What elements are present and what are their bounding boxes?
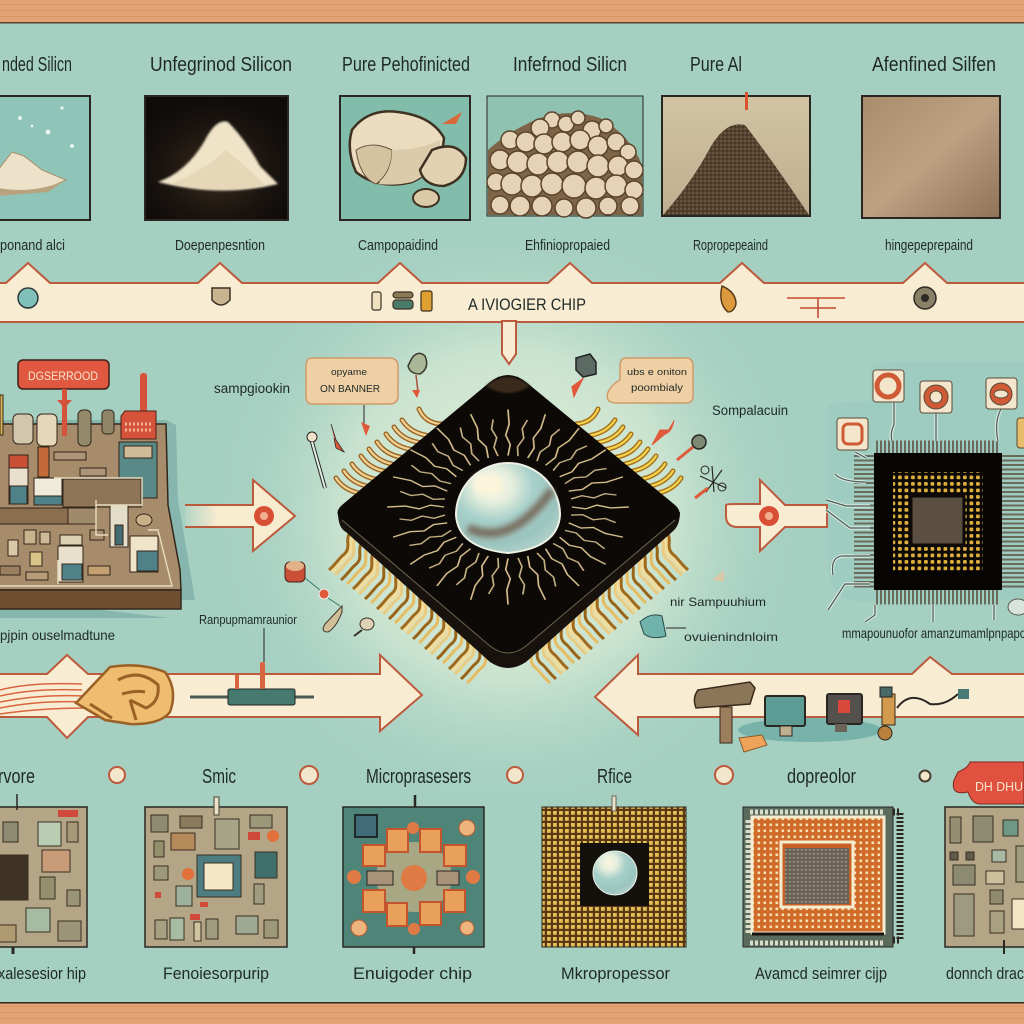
bottom left arrow band bbox=[0, 628, 422, 738]
bottom row number badges bbox=[109, 766, 930, 784]
panel: bottom chip 6 bbox=[945, 807, 1024, 954]
lower gold pins bbox=[329, 532, 688, 683]
components bbox=[0, 395, 158, 582]
monitor b bbox=[827, 694, 862, 732]
arrow: chip to right chip bbox=[726, 480, 827, 551]
top row captions: hingepeprepaind bbox=[885, 238, 973, 254]
icon cards bbox=[837, 370, 1024, 450]
top row headings bbox=[2, 54, 996, 76]
top row headings: Unfegrinod Silicon bbox=[150, 54, 292, 76]
icon: red cylinder bbox=[285, 561, 340, 606]
label: lower right b: ovuienindnloim bbox=[684, 630, 778, 644]
panel: raw silica bbox=[0, 96, 90, 220]
bottom row headings: Rfice bbox=[597, 766, 632, 788]
panel: bottom chip 5 bbox=[743, 807, 900, 947]
label: left lower: Ranpupmamraunior bbox=[199, 612, 298, 627]
arrow: board to chip bbox=[185, 480, 295, 551]
upper gold pins bbox=[336, 409, 681, 494]
red unit bbox=[121, 373, 156, 439]
panel: bottom chip 1 bbox=[0, 794, 87, 954]
band icon: cup bbox=[212, 288, 230, 305]
band icon: washer bbox=[914, 287, 936, 309]
band icon: red ticks bbox=[787, 298, 845, 318]
panel: rock chunks bbox=[340, 96, 470, 220]
top row captions bbox=[0, 238, 973, 254]
icon: tan wedge bbox=[712, 570, 724, 582]
callout: left: opyame bbox=[331, 367, 367, 378]
callout: left: ON BANNER bbox=[320, 384, 380, 395]
bottom row headings: Smic bbox=[202, 766, 236, 788]
teal bubbles background bbox=[828, 362, 1024, 602]
process band bbox=[0, 263, 1024, 322]
label: left process: sampgiookin bbox=[214, 381, 290, 396]
top row captions: Campopaidind bbox=[358, 238, 438, 254]
bottom row captions: Fenoiesorpurip bbox=[163, 964, 269, 983]
top row headings: Pure Pehofinicted bbox=[342, 54, 470, 76]
label: upper right: Sompalacuin bbox=[712, 403, 788, 418]
icon: red marker right bbox=[652, 420, 674, 445]
top row captions: Ropropepeaind bbox=[693, 238, 768, 254]
gold connector bbox=[76, 665, 173, 724]
wires bbox=[826, 402, 1001, 622]
icon: red marker left bbox=[331, 424, 344, 452]
bottom row headings: Microprasesers bbox=[366, 766, 471, 788]
bottom row captions: Mkropropessor bbox=[561, 964, 670, 983]
small orange tag bbox=[739, 735, 767, 752]
callout: right: poombialy bbox=[631, 383, 683, 394]
sign post bbox=[694, 682, 755, 743]
central microprocessor chip bbox=[329, 375, 688, 683]
wood frame top bbox=[0, 0, 1024, 24]
top row headings: Pure Al bbox=[690, 54, 742, 76]
bottom row captions: Enuigoder chip bbox=[353, 964, 472, 983]
puddle bbox=[738, 718, 882, 742]
resistor bbox=[190, 628, 314, 705]
chip body top bbox=[338, 375, 680, 653]
band icon: capsules bbox=[372, 291, 432, 311]
top row headings: nded Silicn bbox=[2, 54, 72, 76]
monitor a bbox=[765, 696, 805, 736]
panel: refined silicon bbox=[862, 96, 1000, 218]
icon: magnifier bbox=[677, 435, 706, 460]
icon: teal block bbox=[640, 615, 686, 638]
band icon: seed bbox=[721, 286, 736, 312]
icon: peg bbox=[323, 606, 374, 636]
bottom row captions: Avamcd seimrer cijp bbox=[755, 964, 887, 983]
label: lower right a: nir Sampuuhium bbox=[670, 595, 766, 609]
bottom row captions: xalesesior hip bbox=[0, 964, 86, 983]
small chip at edge bbox=[1008, 599, 1024, 615]
bottom right arrow band bbox=[595, 655, 1024, 752]
bottom row headings bbox=[0, 766, 856, 788]
center die bbox=[911, 496, 964, 545]
red tag bottom right bbox=[953, 762, 1024, 804]
panel: dark powder pile bbox=[662, 92, 810, 216]
callout: right: ubs e oniton bbox=[627, 367, 687, 377]
bottom row headings: dopreolor bbox=[787, 766, 856, 788]
top row headings: Infefrnod Silicn bbox=[513, 54, 627, 76]
trace lines bbox=[0, 478, 172, 586]
red label bbox=[18, 360, 109, 436]
bottom row captions bbox=[0, 964, 1024, 983]
usb device bbox=[878, 687, 969, 740]
callout: left bbox=[306, 358, 398, 436]
top row headings: Afenfined Silfen bbox=[872, 54, 996, 76]
band title: A IVIOGIER CHIP bbox=[468, 295, 586, 314]
panel: circuit board machine bbox=[0, 360, 195, 618]
panel: bottom chip 4 bbox=[542, 796, 686, 947]
chip pins bbox=[864, 447, 1013, 597]
callout: right bbox=[607, 358, 693, 403]
panel: bottom chip 2 bbox=[145, 797, 287, 947]
board front side bbox=[0, 590, 181, 609]
dotted ring bbox=[893, 472, 983, 571]
icon: snowflake bbox=[695, 466, 726, 498]
chip traces bbox=[387, 409, 629, 605]
silicon dome bbox=[456, 463, 560, 553]
small icons around chip bbox=[285, 353, 726, 638]
chip square bbox=[874, 453, 1002, 590]
wires bbox=[0, 684, 88, 714]
board top face bbox=[0, 424, 181, 590]
right packaged chip bbox=[826, 362, 1024, 622]
icon: bulb bbox=[408, 353, 427, 398]
top row captions: Doepenpesntion bbox=[175, 238, 265, 254]
panel: white powder on black bbox=[145, 96, 288, 220]
band icon: teal sphere bbox=[18, 288, 38, 308]
panel: pebbles bbox=[487, 96, 643, 218]
red label: DGSERROOD bbox=[28, 369, 98, 383]
chip body side bbox=[338, 512, 680, 668]
down arrow from band bbox=[502, 321, 516, 364]
panel: bottom chip 3 bbox=[343, 795, 484, 954]
top row captions: ponand alci bbox=[0, 238, 65, 254]
wood frame bottom bbox=[0, 1002, 1024, 1024]
label: board caption: pjpin ouselmadtune bbox=[0, 627, 115, 643]
top row captions: Ehfiniopropaied bbox=[525, 238, 610, 254]
icon: cube bbox=[572, 354, 596, 396]
icon: pin left bbox=[307, 432, 325, 488]
